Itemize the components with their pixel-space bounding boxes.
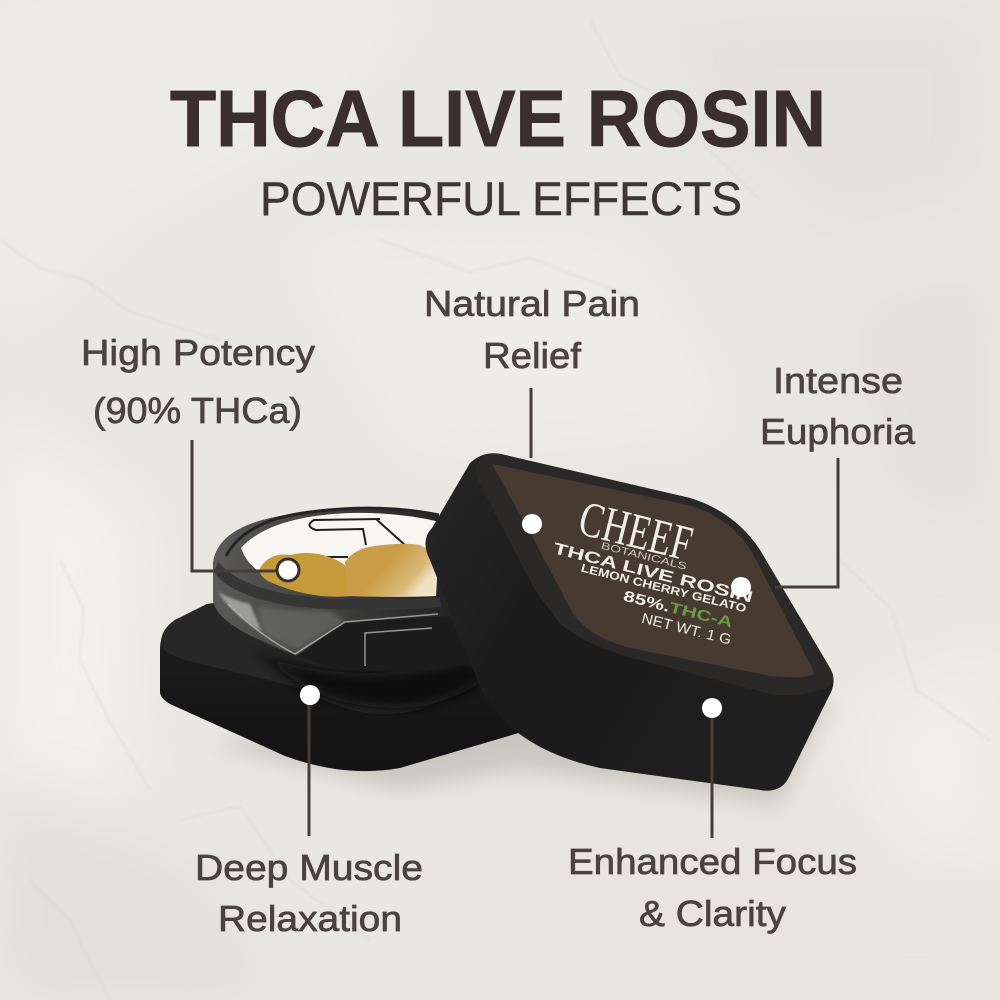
lid label text: THCA LIVE ROSIN <box>551 540 754 606</box>
rosin right blob <box>345 544 436 597</box>
jar rim highlight <box>226 508 439 556</box>
jar front rim <box>214 562 441 610</box>
lid label text: CHEEF <box>574 490 698 571</box>
shadow under product <box>210 700 830 805</box>
marker: deep muscle relaxation <box>300 685 320 705</box>
label: enhanced focus and clarity: Enhanced Focus <box>568 841 857 882</box>
marker: natural pain relief <box>522 514 542 534</box>
jar dark lower ring <box>296 616 470 672</box>
subtitle: POWERFUL EFFECTS <box>260 172 742 225</box>
label: intense euphoria <box>760 360 916 452</box>
lid top rim <box>476 454 833 695</box>
lid label text <box>540 485 768 651</box>
connector: high potency <box>192 440 288 571</box>
label: high potency: (90% THCa) <box>93 390 302 431</box>
connector: enhanced focus <box>710 708 714 838</box>
label: natural pain relief: Natural Pain <box>424 283 640 324</box>
label: deep muscle relaxation: Deep Muscle <box>195 847 423 888</box>
cavity embossed line <box>309 519 405 557</box>
marker: high potency <box>277 559 299 581</box>
lid label text: NET WT. 1 G <box>640 611 733 649</box>
product: jar base and lid <box>160 453 834 805</box>
label: intense euphoria: Euphoria <box>760 411 916 452</box>
connector: deep muscle relaxation <box>308 696 310 836</box>
lid brown label <box>492 464 814 677</box>
label: high potency: High Potency <box>81 332 315 373</box>
label: high potency <box>81 332 315 431</box>
label: enhanced focus and clarity: & Clarity <box>639 893 786 934</box>
connector: natural pain relief <box>530 388 532 458</box>
jar base <box>160 590 522 771</box>
connector: intense euphoria <box>775 458 838 587</box>
label: natural pain relief: Relief <box>483 335 582 376</box>
lid label text: LEMON CHERRY GELATO <box>580 563 748 615</box>
label: deep muscle relaxation: Relaxation <box>218 898 402 939</box>
jar glass wall detail <box>228 604 438 666</box>
glass jar outer wall <box>213 508 470 670</box>
title: THCA LIVE ROSIN <box>170 74 826 163</box>
jar inner cavity <box>241 513 440 597</box>
jar base top surface <box>161 600 500 714</box>
jar mottled reflection <box>258 606 345 650</box>
lid body <box>425 453 834 791</box>
jar base shadow band <box>250 650 490 708</box>
jar wall highlight <box>218 592 262 632</box>
lid label text: BOTANICALS <box>600 541 688 573</box>
label: deep muscle relaxation <box>195 847 423 939</box>
label: natural pain relief <box>424 283 640 376</box>
label: enhanced focus and clarity <box>568 841 857 934</box>
marker: enhanced focus <box>702 698 722 718</box>
rosin left blob <box>260 553 352 597</box>
marker: intense euphoria <box>731 577 751 597</box>
lid label text: 85%. THC-A <box>622 588 735 631</box>
label: intense euphoria: Intense <box>773 360 903 401</box>
